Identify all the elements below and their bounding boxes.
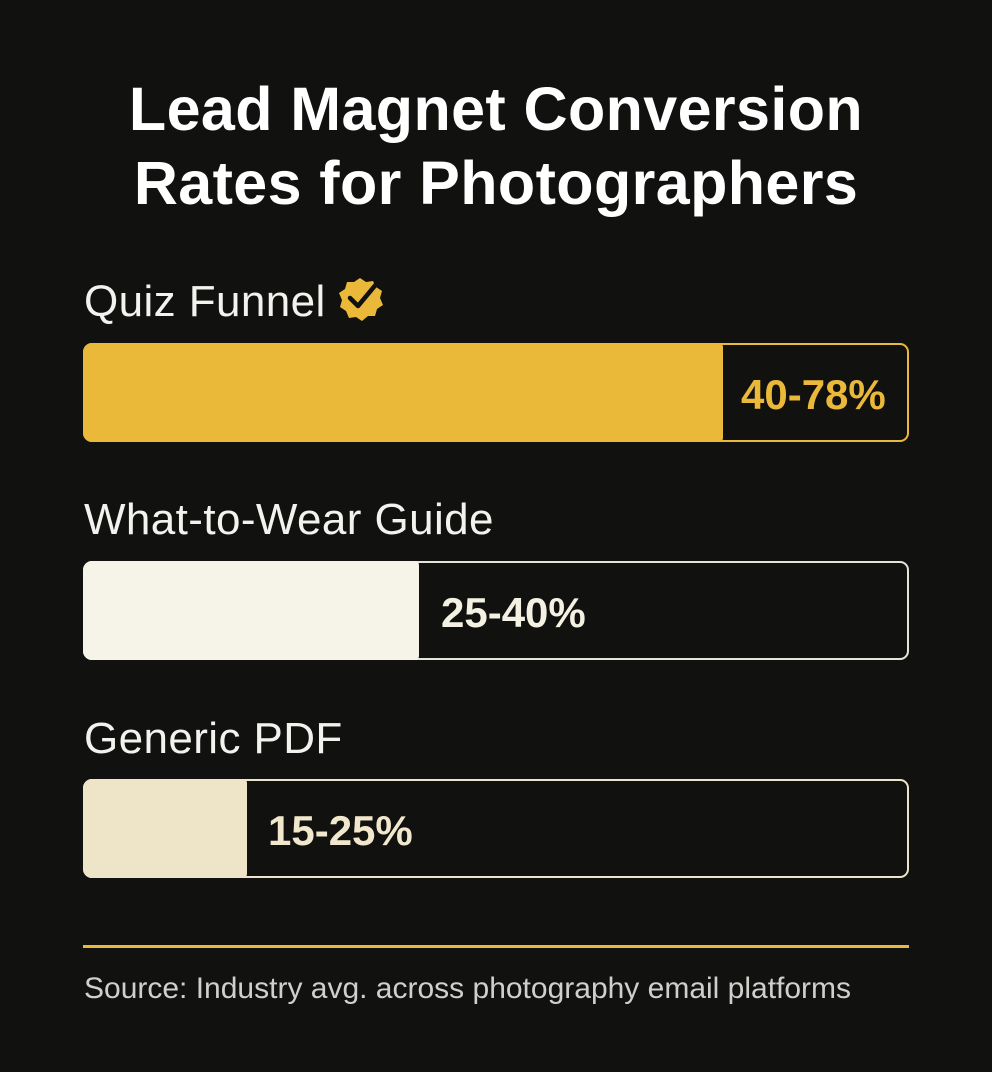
bar: quiz funnel 40-78%: 40-78%	[741, 370, 886, 418]
label: generic pdf: Generic PDF	[84, 714, 343, 763]
bar: quiz funnel 40-78%	[83, 343, 909, 442]
source note: Source: Industry avg. across photography email platforms	[84, 972, 851, 1005]
label: quiz funnel: Quiz Funnel	[84, 277, 326, 326]
title: Rates for Photographers	[134, 149, 858, 217]
icon: check badge	[339, 278, 383, 321]
bar: what-to-wear 25-40%: 25-40%	[441, 588, 586, 636]
bar: generic pdf 15-25%	[83, 779, 909, 878]
label: what-to-wear guide: What-to-Wear Guide	[84, 495, 494, 544]
title	[129, 75, 863, 217]
title: Lead Magnet Conversion	[129, 75, 863, 143]
bar: what-to-wear 25-40%	[83, 561, 909, 660]
bar: generic pdf 15-25%: 15-25%	[268, 806, 413, 854]
